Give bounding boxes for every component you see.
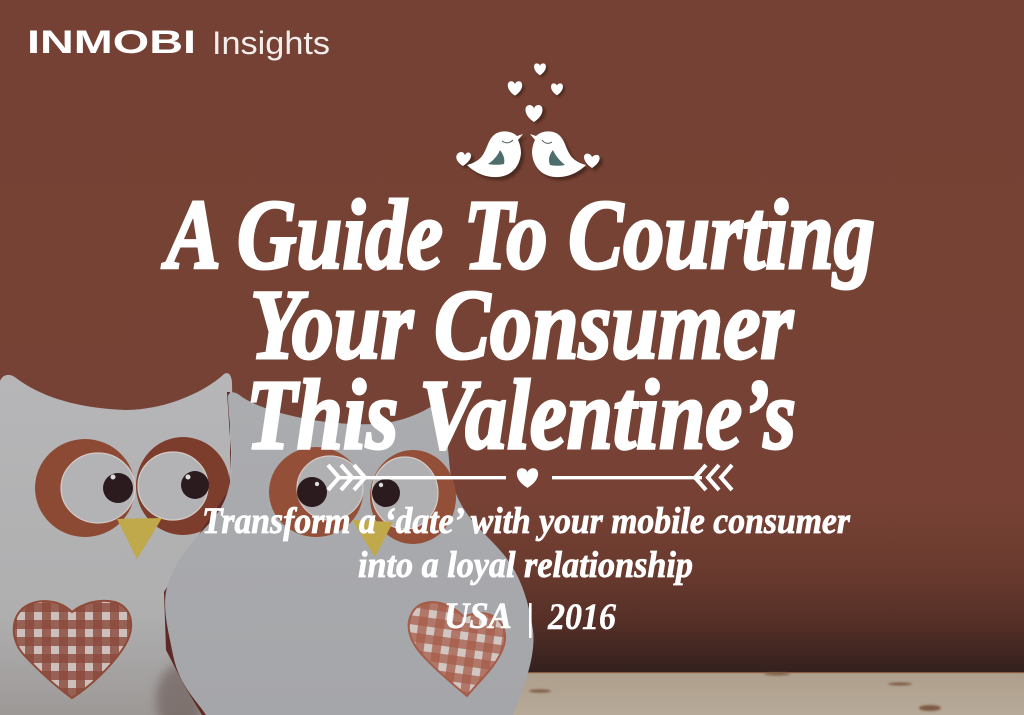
- region and year: [444, 596, 616, 638]
- subtitle: [202, 501, 851, 586]
- right owl right eye: [370, 450, 456, 544]
- shadow between owls: [156, 664, 204, 715]
- title: This Valentine’s: [246, 359, 796, 470]
- logo: InMobi Insights: [27, 24, 330, 61]
- subtitle: into a loyal relationship: [358, 545, 693, 586]
- divider: arrow with heart: [328, 465, 732, 490]
- title: A Guide To Courting: [161, 179, 875, 290]
- left owl left eye: [35, 439, 135, 537]
- right owl gingham heart: [409, 602, 505, 696]
- right owl left eye: [269, 447, 363, 537]
- title: Your Consumer: [250, 269, 794, 380]
- logo insights label: Insights: [212, 25, 330, 61]
- left owl beak: [117, 518, 162, 559]
- logo wordmark: INMOBI: [27, 24, 196, 60]
- title: [161, 179, 875, 470]
- right bird: [530, 131, 600, 177]
- wooden table: [480, 672, 1024, 715]
- left bird: [456, 131, 523, 177]
- subtitle: Transform a ‘date’ with your mobile consumer: [202, 501, 851, 542]
- right owl beak: [352, 520, 393, 557]
- right owl plush: [164, 392, 533, 715]
- region and year: USA: [444, 596, 512, 637]
- region and year: 2016: [547, 597, 616, 638]
- left owl plush: [0, 373, 234, 715]
- left owl right eye: [136, 437, 230, 535]
- icon: love birds with hearts: [456, 63, 603, 180]
- left owl gingham heart: [14, 601, 131, 698]
- floating hearts: [508, 63, 565, 124]
